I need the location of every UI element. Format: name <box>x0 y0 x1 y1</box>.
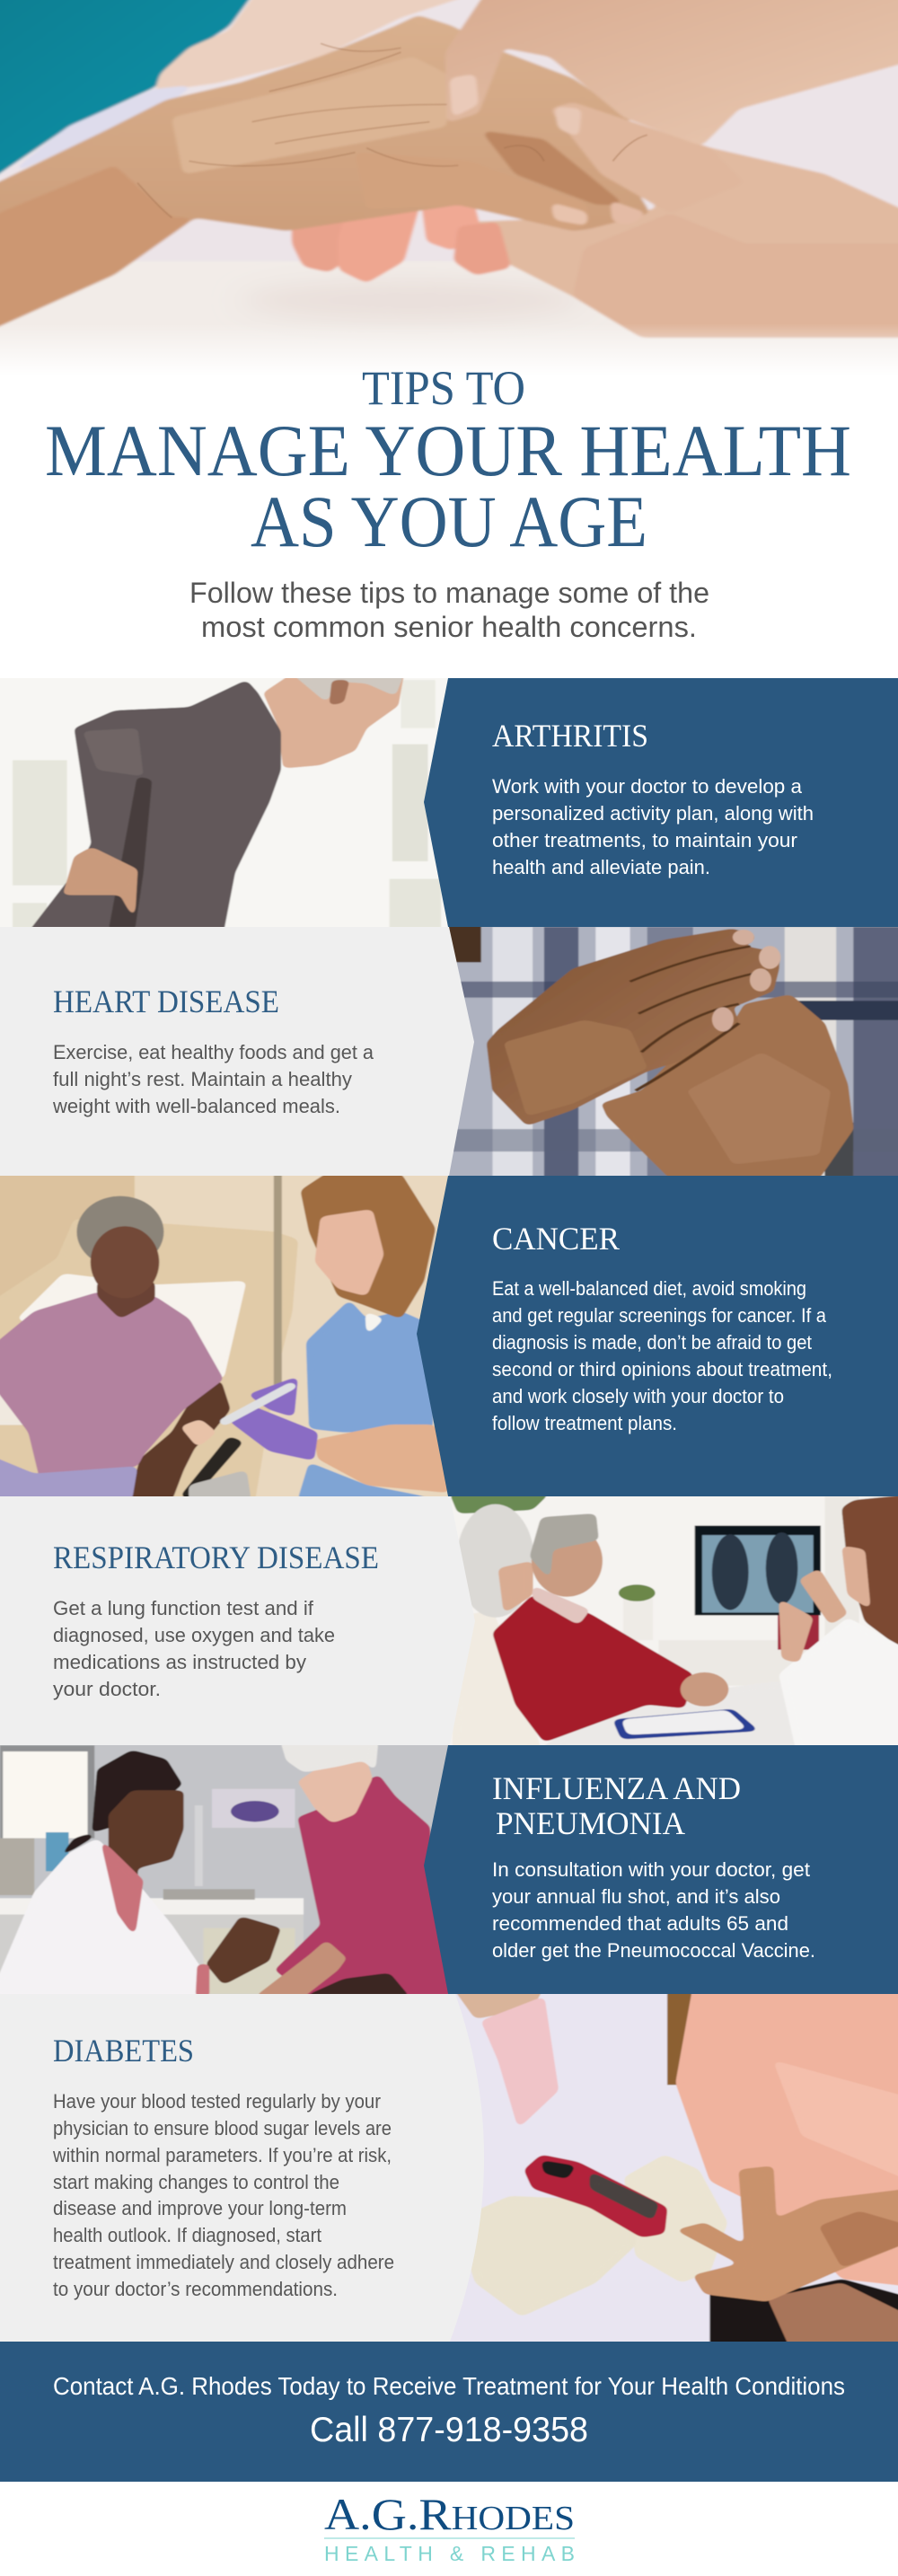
heading: cancer: CANCER <box>492 1221 620 1257</box>
heading: influenza and pneumonia <box>492 1770 741 1841</box>
panel: influenza and pneumonia <box>424 1745 898 1994</box>
heading: influenza and pneumonia: INFLUENZA AND <box>492 1770 741 1806</box>
text: arthritis tip: other treatments, to maintain your <box>492 829 797 851</box>
text: diabetes tip: within normal parameters. If you’re at risk, <box>52 2144 392 2166</box>
text: diabetes tip <box>52 2090 394 2300</box>
nurse lower palm <box>478 147 898 298</box>
text: arthritis tip: personalized activity plan, along with <box>492 802 814 825</box>
panel: arthritis <box>424 678 898 927</box>
hero photo: holding hands <box>0 0 898 387</box>
subtitle: most common senior health concerns. <box>201 611 697 643</box>
logo: A.G. Rhodes Health &amp; Rehab <box>324 2489 575 2565</box>
text: diabetes tip: treatment immediately and closely adhere <box>53 2251 394 2273</box>
text: respiratory disease tip <box>53 1597 335 1700</box>
under fingers <box>289 221 345 273</box>
phone number: Call 877-918-9358 <box>310 2411 588 2449</box>
logo: A.G. Rhodes Health &amp; Rehab: HEALTH & REHAB <box>324 2542 575 2565</box>
heading: respiratory disease: RESPIRATORY DISEASE <box>53 1539 379 1575</box>
text: influenza tip: recommended that adults 65 and <box>492 1912 788 1935</box>
text: cancer tip: and get regular screenings for cancer. If a <box>492 1304 827 1327</box>
heading: diabetes: DIABETES <box>53 2033 194 2069</box>
title: MANAGE YOUR HEALTH <box>45 410 851 491</box>
text: cancer tip: diagnosis is made, don’t be afraid to get <box>492 1331 812 1354</box>
nurse lower thumb <box>552 102 674 205</box>
heading: influenza and pneumonia: PNEUMONIA <box>496 1805 685 1841</box>
contact text: Contact A.G. Rhodes Today to Receive Treatment for Your Health Conditions <box>53 2372 845 2400</box>
title: AS YOU AGE <box>251 481 647 562</box>
text: arthritis tip: Work with your doctor to develop a <box>492 775 803 798</box>
text: diabetes tip: health outlook. If diagnosed, start <box>53 2224 321 2246</box>
heading: heart disease: HEART DISEASE <box>53 984 279 1019</box>
text: influenza tip: In consultation with your doctor, get <box>492 1858 810 1881</box>
title: TIPS TO <box>362 361 525 415</box>
text: respiratory disease tip: diagnosed, use oxygen and take <box>53 1624 335 1646</box>
text: arthritis tip <box>492 775 814 878</box>
text: heart disease tip: full night’s rest. Maintain a healthy <box>53 1068 352 1090</box>
panel: cancer <box>417 1176 898 1496</box>
text: heart disease tip: weight with well-balanced meals. <box>52 1095 340 1117</box>
panel: diabetes <box>0 1994 484 2342</box>
text: influenza tip <box>492 1858 815 1962</box>
title <box>45 361 851 562</box>
text: diabetes tip: to your doctor’s recommendations. <box>53 2278 338 2300</box>
text: influenza tip: older get the Pneumococcal Vaccine. <box>492 1939 815 1962</box>
panel: respiratory disease <box>0 1496 475 1745</box>
text: cancer tip: follow treatment plans. <box>492 1412 677 1434</box>
heading: arthritis: ARTHRITIS <box>492 718 648 754</box>
text: heart disease tip <box>52 1041 374 1117</box>
logo: A.G. Rhodes Health &amp; Rehab: A.G.R HODES <box>324 2489 575 2539</box>
subtitle <box>189 577 709 643</box>
text: influenza tip: your annual flu shot, and it’s also <box>492 1885 780 1908</box>
panel: heart disease <box>0 927 474 1176</box>
text: cancer tip: second or third opinions about treatment, <box>492 1358 832 1381</box>
photo: hands on chest <box>441 924 898 1180</box>
call to action band <box>0 2342 898 2482</box>
text: diabetes tip: start making changes to control the <box>53 2171 339 2193</box>
photo: doctor showing lung x-ray <box>441 1493 898 1750</box>
subtitle: Follow these tips to manage some of the <box>189 577 709 609</box>
photo: chemotherapy nurse and patient <box>0 1173 470 1500</box>
photo: blood glucose test <box>441 1987 898 2349</box>
text: cancer tip <box>492 1277 832 1434</box>
text: diabetes tip: Have your blood tested regularly by your <box>53 2090 381 2113</box>
text: arthritis tip: health and alleviate pain. <box>492 856 710 878</box>
text: cancer tip: Eat a well-balanced diet, avoid smoking <box>492 1277 806 1300</box>
text: respiratory disease tip: medications as instructed by <box>53 1651 306 1673</box>
text: heart disease tip: Exercise, eat healthy foods and get a <box>53 1041 374 1063</box>
photo: man with back pain <box>0 674 470 931</box>
text: cancer tip: and work closely with your doctor to <box>492 1385 784 1407</box>
text: respiratory disease tip: your doctor. <box>53 1678 161 1700</box>
text: diabetes tip: physician to ensure blood sugar levels are <box>53 2117 392 2139</box>
photo: doctor giving vaccine <box>0 1741 470 1997</box>
text: diabetes tip: disease and improve your long-term <box>53 2197 347 2219</box>
text: respiratory disease tip: Get a lung function test and if <box>53 1597 314 1619</box>
nurse upper hand <box>445 0 898 146</box>
old arm and hand <box>0 14 650 232</box>
